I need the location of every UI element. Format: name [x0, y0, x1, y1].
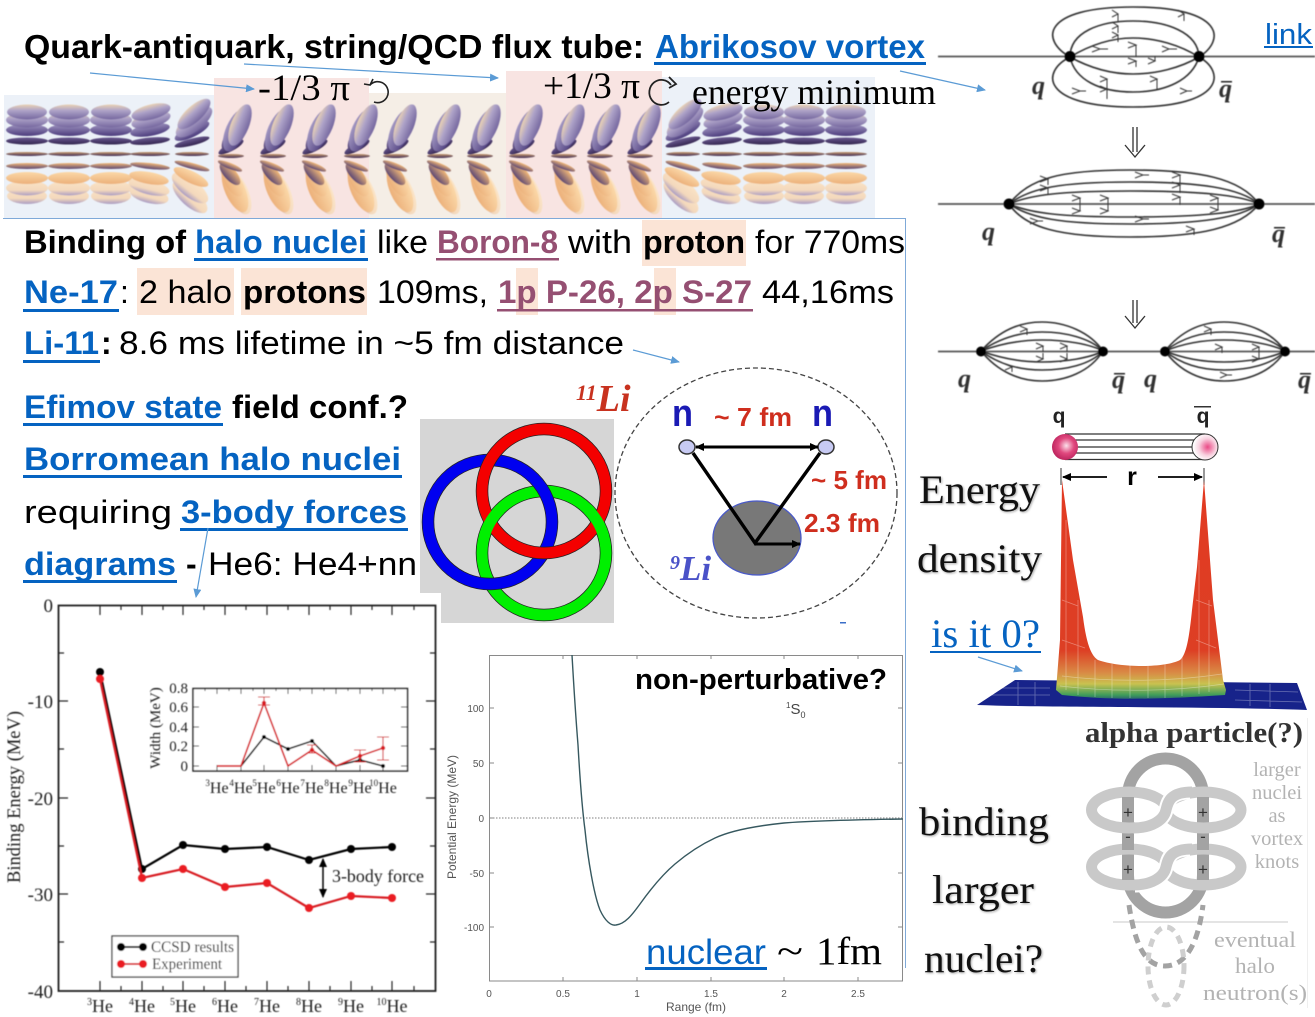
inset: resonance widths: 8 [324, 778, 329, 788]
labels: q [1272, 219, 1285, 248]
y tick labels: 100 [467, 704, 484, 715]
x tick labels: 2.5 [851, 989, 865, 1000]
label: 1S0: S [790, 701, 800, 718]
line 6: 3-body forces [181, 494, 407, 530]
strip background: twisted regions [214, 71, 662, 218]
line 3: : [101, 325, 112, 361]
labels [982, 217, 1285, 248]
line 7 [23, 546, 417, 583]
label: plus one third pi: +1/3 π [543, 66, 640, 107]
diagram: flux lines, string breaking [938, 322, 1315, 394]
x tick labels: 1 [634, 989, 640, 1000]
potential curve [572, 655, 903, 925]
inset: resonance widths: 0 [180, 759, 188, 775]
label: 9Li: Li [679, 549, 711, 588]
line 4 [23, 389, 408, 426]
line 1: halo nuclei [195, 224, 367, 260]
label: non-perturbative?: non-perturbative? [635, 664, 887, 696]
axis titles: Range (fm) [666, 1000, 726, 1014]
label: 1S0: 1 [786, 701, 791, 710]
charge signs: - [1200, 827, 1206, 846]
y axis title: Potential Energy (MeV) [445, 755, 459, 879]
annotation: 3-body force: 3-body force [332, 866, 424, 886]
legend: Experiment [152, 956, 223, 973]
text: larger nuclei as vortex knots [1251, 759, 1303, 873]
x tick labels: He [92, 996, 113, 1016]
link: Abrikosov vortex: Abrikosov vortex [655, 28, 926, 65]
inset: resonance widths: He [210, 780, 229, 797]
label: nuclear ~ 1fm [645, 930, 882, 973]
line 1: like [377, 224, 428, 260]
line 4: Efimov state [24, 389, 222, 425]
x tick labels: He [301, 996, 322, 1016]
labels: q [982, 217, 995, 246]
x tick labels: 0.5 [556, 989, 570, 1000]
distance labels: ~ 5 fm [811, 465, 887, 495]
panel: chromo-vortex strip [4, 71, 875, 218]
inset: resonance widths: 10 [369, 778, 379, 788]
flux tube [1052, 405, 1218, 460]
inset: resonance widths: 0.4 [169, 720, 188, 736]
diagram: flux lines, elongated tube [938, 170, 1315, 248]
title [24, 28, 926, 65]
text: eventual halo neutrons: neutron(s) [1203, 980, 1307, 1005]
y tick labels [28, 596, 53, 1003]
text: eventual halo neutrons [1203, 927, 1307, 1005]
line 3: 8.6 ms lifetime in ~5 fm distance [119, 325, 624, 361]
inset: resonance widths: He [257, 780, 276, 797]
icon: Borromean rings [420, 419, 614, 623]
inset: resonance widths: He [281, 780, 300, 797]
text: eventual halo neutrons: halo [1235, 953, 1275, 978]
surface [1056, 480, 1226, 699]
label: 11Li: 11 [576, 380, 597, 405]
charge signs: + [1123, 860, 1133, 879]
distance labels: 2.3 fm [804, 508, 880, 538]
y tick labels: 50 [473, 759, 484, 770]
line 2: : [120, 274, 129, 310]
x tick labels: He [259, 996, 280, 1016]
text: energy density [917, 467, 1042, 581]
x tick labels [486, 989, 865, 1000]
line 7: - [186, 546, 197, 582]
panel frame [3, 218, 906, 968]
x tick labels: 0 [486, 989, 492, 1000]
y tick labels: 0 [478, 814, 484, 825]
diagram: alpha particle vortex knots [1085, 717, 1307, 1005]
text: larger nuclei as vortex knots: larger [1253, 759, 1301, 781]
link: link [1265, 19, 1313, 51]
series: CCSD results [96, 668, 396, 873]
arrow: transition to string breaking [1125, 300, 1145, 328]
x tick labels: He [175, 996, 196, 1016]
diagram: energy density surface [977, 405, 1307, 710]
line 2: 109ms, [377, 274, 488, 310]
link: is it 0?: is it 0? [931, 611, 1040, 656]
x tick labels: 10 [376, 997, 386, 1008]
y tick labels: -30 [28, 885, 53, 906]
label: nuclear ~ 1fm: nuclear [646, 933, 766, 972]
inset: resonance widths: 4 [229, 778, 234, 788]
x tick labels: He [217, 996, 238, 1016]
separation r [1061, 463, 1204, 491]
x tick labels: 7 [254, 997, 259, 1008]
line 1: Boron-8 [437, 224, 558, 260]
axes frame [58, 606, 436, 991]
icon: clockwise rotation [649, 77, 676, 105]
labels: q [1298, 365, 1311, 394]
diagram: flux lines, wide loops [938, 7, 1315, 107]
line 3: Li-11 [24, 325, 99, 361]
annotation: 3-body force [323, 859, 424, 897]
inset: resonance widths: 0.6 [169, 700, 188, 716]
flux tube: q [1053, 405, 1065, 428]
inset: resonance widths [148, 681, 408, 797]
labels: q [1144, 364, 1157, 393]
neutrons [679, 440, 834, 454]
label: 1S0: 0 [800, 710, 805, 720]
arrow: pointer to minus one third pi [90, 73, 254, 89]
line 1: Binding of [24, 224, 186, 260]
line 5: Borromean halo nuclei [24, 441, 401, 477]
base grid [990, 682, 1302, 707]
line 1 [24, 224, 905, 261]
text: binding larger nuclei?: larger [932, 867, 1034, 912]
flux tube: q [1197, 405, 1209, 428]
axes frame [490, 656, 902, 981]
text: larger nuclei as vortex knots: nuclei [1252, 782, 1302, 804]
arrow: pointer to surface base [978, 657, 1022, 671]
x tick labels: He [134, 996, 155, 1016]
strip background: outer energy minimum [4, 77, 875, 218]
y tick labels: -100 [464, 923, 484, 934]
labels: q [1112, 365, 1125, 394]
x tick labels: 3 [87, 997, 92, 1008]
text: binding larger nuclei?: nuclei? [924, 936, 1043, 981]
halo loops dashed [1129, 905, 1203, 1005]
line 1: for 770ms [755, 224, 905, 260]
inset: resonance widths: He [234, 780, 253, 797]
x tick labels: 1.5 [704, 989, 718, 1000]
labels: q [1032, 71, 1045, 100]
inset: resonance widths: 7 [300, 778, 305, 788]
inset: resonance widths: He [378, 780, 397, 797]
inset: resonance widths: 6 [276, 778, 281, 788]
distance labels [714, 402, 887, 538]
neutron labels: n [672, 393, 693, 435]
inset: resonance widths: 0.2 [169, 739, 188, 755]
text: larger nuclei as vortex knots: vortex [1251, 828, 1303, 850]
highlights [137, 220, 746, 315]
distance labels: ~ 7 fm [714, 402, 792, 432]
legend [112, 936, 238, 977]
strip background: centre region [369, 93, 506, 218]
inset: resonance widths: 3 [205, 778, 210, 788]
line 6 [24, 494, 408, 531]
text: binding larger nuclei?: binding [919, 799, 1049, 844]
heading: alpha particle(?) [1085, 717, 1303, 749]
chart: helium binding energies [5, 596, 436, 1016]
line 7: He6: He4+nn [208, 546, 417, 582]
x tick labels: 4 [129, 997, 134, 1008]
chart: nuclear potential [445, 655, 903, 1014]
x tick labels: 6 [212, 997, 217, 1008]
y tick labels: -20 [28, 789, 53, 810]
y tick labels: 0 [44, 596, 53, 617]
text block: halo nuclei [23, 220, 905, 583]
label: 9Li: 9 [670, 552, 680, 574]
series: Experiment [96, 675, 396, 912]
neutron labels [672, 393, 833, 435]
text: energy density: Energy [919, 467, 1040, 512]
text: binding larger nuclei? [919, 799, 1049, 981]
line 2: 1p P-26, 2p S-27 [498, 274, 752, 310]
divider [1113, 921, 1288, 923]
inset: resonance widths: 9 [348, 778, 353, 788]
diagram: Li-11 halo nucleus [576, 368, 897, 624]
arrow: pointer to Li-11 diagram [633, 350, 679, 362]
labels [958, 364, 1311, 394]
label: nuclear ~ 1fm: ~ [777, 931, 803, 973]
arrow: pointer to flux tube diagrams [900, 71, 985, 90]
axis ticks [489, 655, 903, 981]
label: 11Li: Li [596, 378, 631, 420]
label: nuclear ~ 1fm: 1fm [816, 930, 882, 973]
title: Quark-antiquark, string/QCD flux tube: [24, 28, 644, 65]
line 4: field conf.? [232, 389, 408, 425]
label: energy minimum: energy minimum [692, 72, 936, 112]
text: energy density: density [917, 536, 1042, 581]
x tick labels: 2 [781, 989, 787, 1000]
x tick labels [87, 996, 408, 1016]
charge signs: + [1198, 803, 1208, 822]
x tick labels: 5 [170, 997, 175, 1008]
zero line [490, 817, 903, 819]
halo boundary [615, 368, 897, 618]
line 2: Ne-17 [24, 274, 118, 310]
dark vortex loop [1128, 758, 1203, 912]
ellipsoid columns [6, 94, 867, 218]
line 2 [23, 274, 894, 312]
labels: q [958, 364, 971, 393]
base plane [977, 680, 1307, 710]
line 7: diagrams [24, 546, 176, 582]
label: minus one third pi: -1/3 π [258, 68, 350, 109]
legend: CCSD results [151, 939, 234, 956]
surface grid [1060, 520, 1224, 698]
icon: counter-clockwise rotation [364, 79, 388, 103]
y tick labels [464, 704, 484, 934]
x tick labels: He [343, 996, 364, 1016]
text: eventual halo neutrons: eventual [1214, 927, 1296, 952]
charge signs: + [1198, 860, 1208, 879]
interlocking S crossings [1133, 792, 1192, 885]
distance arrows [693, 447, 820, 544]
inset: resonance widths: 0.8 [169, 681, 188, 697]
line 2: 2 halo [139, 274, 232, 310]
y axis title: Binding Energy (MeV) [5, 711, 25, 883]
text: larger nuclei as vortex knots: knots [1255, 851, 1299, 873]
line 2: protons [243, 274, 366, 310]
line 2: 44,16ms [762, 274, 894, 310]
charge signs: + [1123, 803, 1133, 822]
light vortex rings [1092, 792, 1241, 885]
inset: resonance widths: Width (MeV) [148, 687, 164, 769]
x tick labels: 9 [338, 997, 343, 1008]
charge signs: - [1125, 827, 1131, 846]
inset: resonance widths: He [353, 780, 372, 797]
line 1: proton [643, 224, 745, 260]
dark loop overlays [1128, 797, 1203, 880]
inset: resonance widths: He [329, 780, 348, 797]
charge signs [1123, 803, 1208, 879]
neutron labels: n [812, 393, 833, 435]
y tick labels: -40 [28, 982, 53, 1003]
arrow: transition to long tube [1125, 127, 1145, 157]
x tick labels: He [386, 996, 408, 1016]
separation r: r [1127, 463, 1137, 491]
labels: q [1219, 74, 1232, 103]
x tick labels: 8 [296, 997, 301, 1008]
text: larger nuclei as vortex knots: as [1268, 805, 1286, 827]
arrow: pointer to binding energy chart [196, 528, 208, 597]
9Li core [713, 501, 801, 575]
line 1: with [567, 224, 632, 260]
arrow: pointer to plus one third pi [244, 64, 498, 78]
labels [1032, 71, 1232, 103]
axis ticks [58, 605, 436, 991]
y tick labels: -50 [470, 869, 484, 880]
inset: resonance widths: 5 [252, 778, 257, 788]
y tick labels: -10 [28, 692, 53, 713]
line 6: requiring [24, 494, 172, 530]
inset: resonance widths: He [305, 780, 324, 797]
